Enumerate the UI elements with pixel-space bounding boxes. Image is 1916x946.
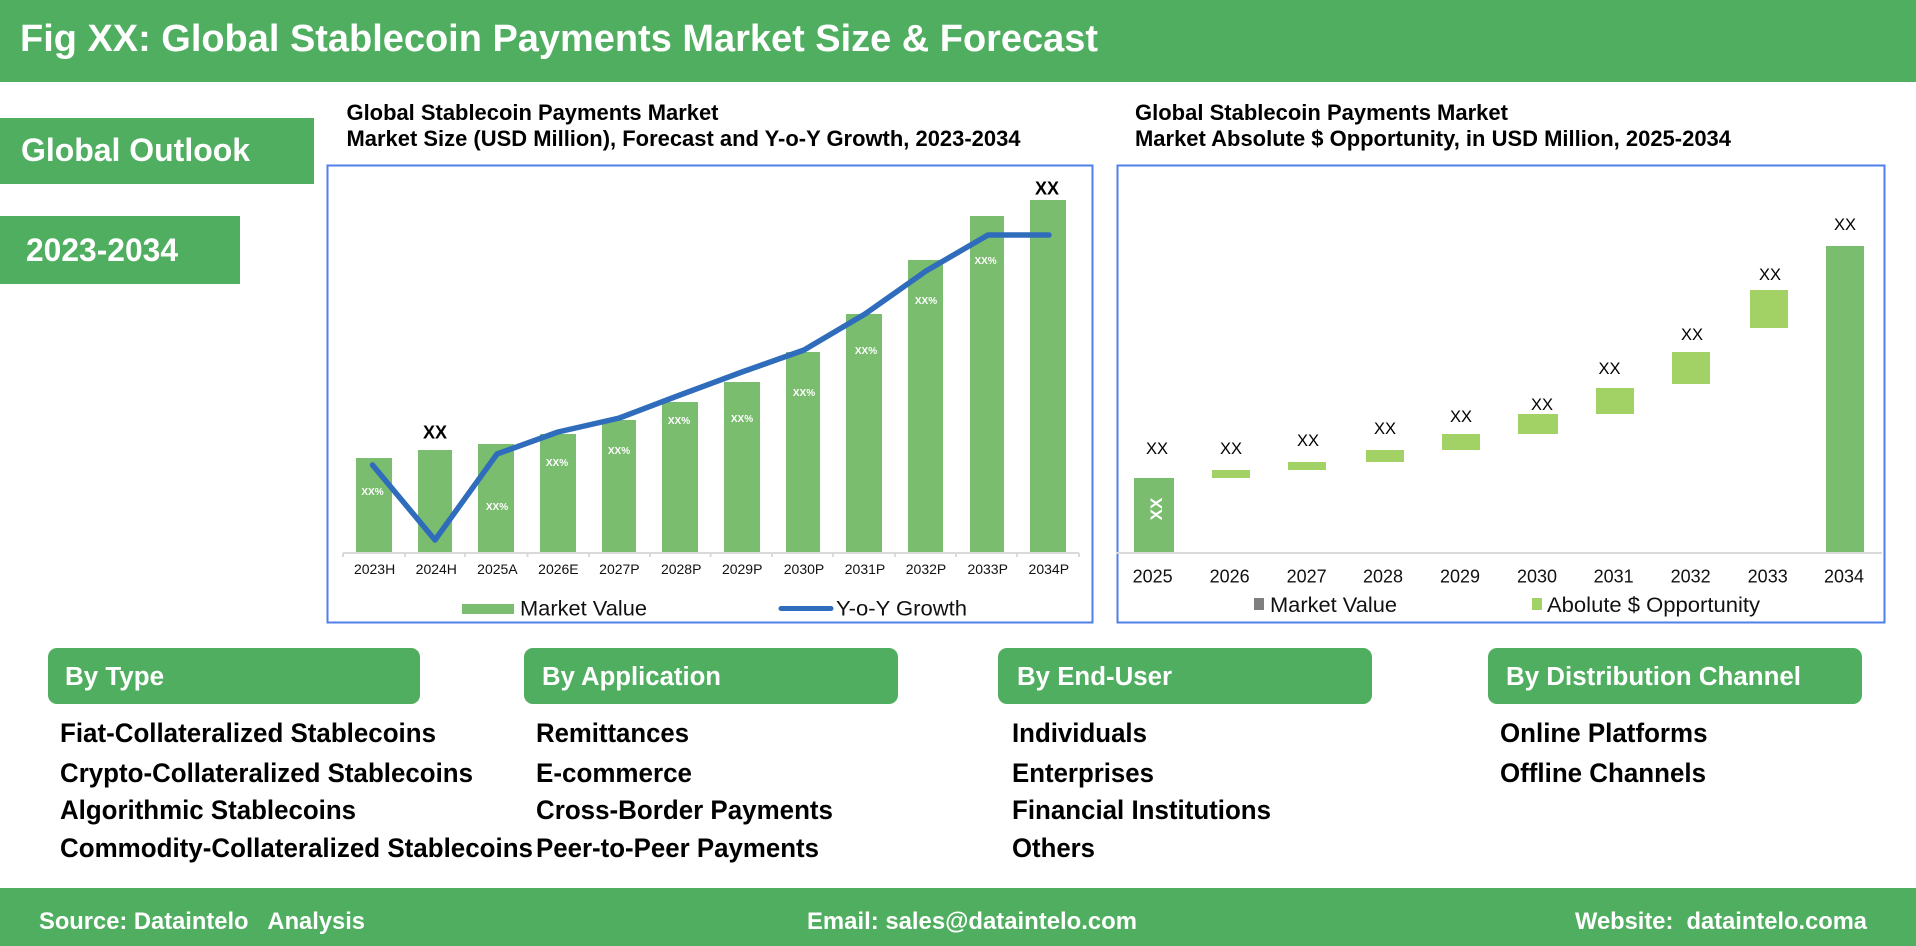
badge: 2023-2034 bbox=[0, 216, 240, 284]
axis year labels: 2027 bbox=[1287, 566, 1327, 586]
bar percentage labels: XX% bbox=[731, 414, 753, 425]
title banner bbox=[0, 0, 1916, 82]
bar chart: market value bbox=[356, 200, 1066, 552]
line: Y-o-Y growth bbox=[372, 235, 1049, 540]
panel: absolute opportunity chart bbox=[1116, 166, 1884, 622]
axis year labels bbox=[354, 561, 1069, 577]
value labels: XX bbox=[1297, 432, 1319, 450]
segment: By Type: Commodity-Collateralized Stablecoins bbox=[60, 833, 533, 863]
x axis bbox=[343, 553, 1079, 557]
axis year labels: 2034 bbox=[1824, 566, 1864, 586]
segment: By End-User: Financial Institutions bbox=[1012, 795, 1271, 825]
footer: source: Source: Dataintelo Analysis bbox=[39, 908, 365, 935]
axis year labels: 2032 bbox=[1671, 566, 1711, 586]
axis year labels: 2023H bbox=[354, 561, 395, 577]
axis year labels: 2031P bbox=[845, 561, 885, 577]
bar percentage labels: XX% bbox=[915, 296, 937, 307]
segment: By Application: Cross-Border Payments bbox=[536, 795, 833, 825]
heading: market size chart: Market Size (USD Million), Forecast and Y-o-Y Growth, 2023-2034 bbox=[346, 126, 1021, 151]
panel: market size and growth chart bbox=[328, 166, 1092, 622]
value labels: XX bbox=[1531, 396, 1553, 414]
legend bbox=[1254, 593, 1760, 617]
heading: absolute opportunity chart: Market Absolute $ Opportunity, in USD Million, 2025-2034 bbox=[1135, 126, 1732, 151]
footer banner bbox=[0, 888, 1916, 946]
bar percentage labels: XX% bbox=[855, 346, 877, 357]
axis year labels: 2026 bbox=[1210, 566, 1250, 586]
segment: By Type bbox=[48, 648, 533, 863]
segment: By Application: E-commerce bbox=[536, 758, 692, 788]
segment: By End-User: Others bbox=[1012, 833, 1095, 863]
rotated bar label: XX bbox=[1147, 497, 1166, 520]
axis year labels: 2024H bbox=[416, 561, 457, 577]
bar percentage labels: XX% bbox=[361, 487, 384, 498]
axis year labels: 2025 bbox=[1133, 566, 1173, 586]
legend: Abolute $ Opportunity bbox=[1547, 593, 1760, 617]
segment: By Application: Remittances bbox=[536, 718, 689, 748]
bar percentage labels: XX% bbox=[608, 446, 630, 457]
legend: Market Value bbox=[1270, 593, 1397, 617]
segment: By Distribution Channel: Online Platforms bbox=[1500, 718, 1708, 748]
footer: website: Website: dataintelo.coma bbox=[1575, 908, 1868, 935]
axis year labels: 2028P bbox=[661, 561, 701, 577]
waterfall bars bbox=[1134, 246, 1864, 552]
value labels: XX bbox=[1374, 420, 1396, 438]
bar percentage labels: XX% bbox=[546, 458, 568, 469]
segment: By Application: By Application bbox=[542, 663, 721, 691]
footer: email: Email: sales@dataintelo.com bbox=[807, 908, 1137, 935]
axis year labels: 2031 bbox=[1594, 566, 1634, 586]
segment: By End-User: By End-User bbox=[1017, 663, 1172, 691]
value labels: XX bbox=[1759, 266, 1781, 284]
title: Fig XX: Global Stablecoin Payments Market Size & Forecast bbox=[20, 18, 1098, 60]
axis year labels: 2029P bbox=[722, 561, 762, 577]
bar percentage labels bbox=[361, 256, 997, 513]
axis year labels: 2033P bbox=[967, 561, 1008, 577]
value labels: XX bbox=[1681, 326, 1703, 344]
value labels: XX bbox=[1146, 440, 1168, 458]
axis year labels: 2030 bbox=[1517, 566, 1557, 586]
segment: By Type: By Type bbox=[65, 663, 164, 691]
segment: By Type: Crypto-Collateralized Stablecoins bbox=[60, 758, 473, 788]
legend bbox=[462, 596, 967, 620]
axis year labels: 2034P bbox=[1029, 561, 1069, 577]
axis year labels: 2030P bbox=[784, 561, 824, 577]
axis year labels: 2029 bbox=[1440, 566, 1480, 586]
bar percentage labels: XX% bbox=[974, 256, 997, 267]
legend: Y-o-Y Growth bbox=[836, 596, 967, 620]
value labels: XX bbox=[1035, 178, 1059, 198]
segment: By Application: Peer-to-Peer Payments bbox=[536, 833, 819, 863]
value labels bbox=[423, 178, 1059, 442]
badge: 2023-2034: 2023-2034 bbox=[26, 232, 178, 268]
heading: market size chart bbox=[346, 100, 1021, 151]
segment: By Distribution Channel: Offline Channels bbox=[1500, 758, 1706, 788]
heading: absolute opportunity chart bbox=[1135, 100, 1732, 151]
legend: Market Value bbox=[520, 596, 647, 620]
segment: By Type: Algorithmic Stablecoins bbox=[60, 795, 356, 825]
segment: By End-User: Enterprises bbox=[1012, 758, 1154, 788]
segment: By End-User: Individuals bbox=[1012, 718, 1147, 748]
axis year labels: 2028 bbox=[1363, 566, 1403, 586]
segment: By Type: Fiat-Collateralized Stablecoins bbox=[60, 718, 436, 748]
heading: absolute opportunity chart: Global Stablecoin Payments Market bbox=[1135, 100, 1509, 125]
axis year labels: 2027P bbox=[599, 561, 640, 577]
bar percentage labels: XX% bbox=[486, 502, 508, 513]
value labels: XX bbox=[1450, 408, 1472, 426]
axis year labels bbox=[1133, 566, 1864, 586]
axis year labels: 2033 bbox=[1748, 566, 1788, 586]
bar percentage labels: XX% bbox=[793, 388, 815, 399]
heading: market size chart: Global Stablecoin Payments Market bbox=[346, 100, 719, 125]
bar percentage labels: XX% bbox=[668, 416, 690, 427]
x axis bbox=[1116, 552, 1882, 554]
value labels: XX bbox=[1220, 440, 1242, 458]
value labels bbox=[1146, 216, 1856, 458]
axis year labels: 2026E bbox=[538, 561, 579, 577]
axis year labels: 2032P bbox=[906, 561, 946, 577]
value labels: XX bbox=[423, 422, 447, 442]
segment: By Distribution Channel: By Distribution Channel bbox=[1506, 663, 1801, 691]
value labels: XX bbox=[1598, 360, 1621, 378]
segment: By End-User bbox=[998, 648, 1372, 863]
axis year labels: 2025A bbox=[477, 561, 518, 577]
badge: Global Outlook: Global Outlook bbox=[21, 132, 250, 168]
value labels: XX bbox=[1834, 216, 1856, 234]
badge: Global Outlook bbox=[0, 118, 314, 184]
segment: By Distribution Channel bbox=[1488, 648, 1862, 788]
segment: By Application bbox=[524, 648, 898, 863]
